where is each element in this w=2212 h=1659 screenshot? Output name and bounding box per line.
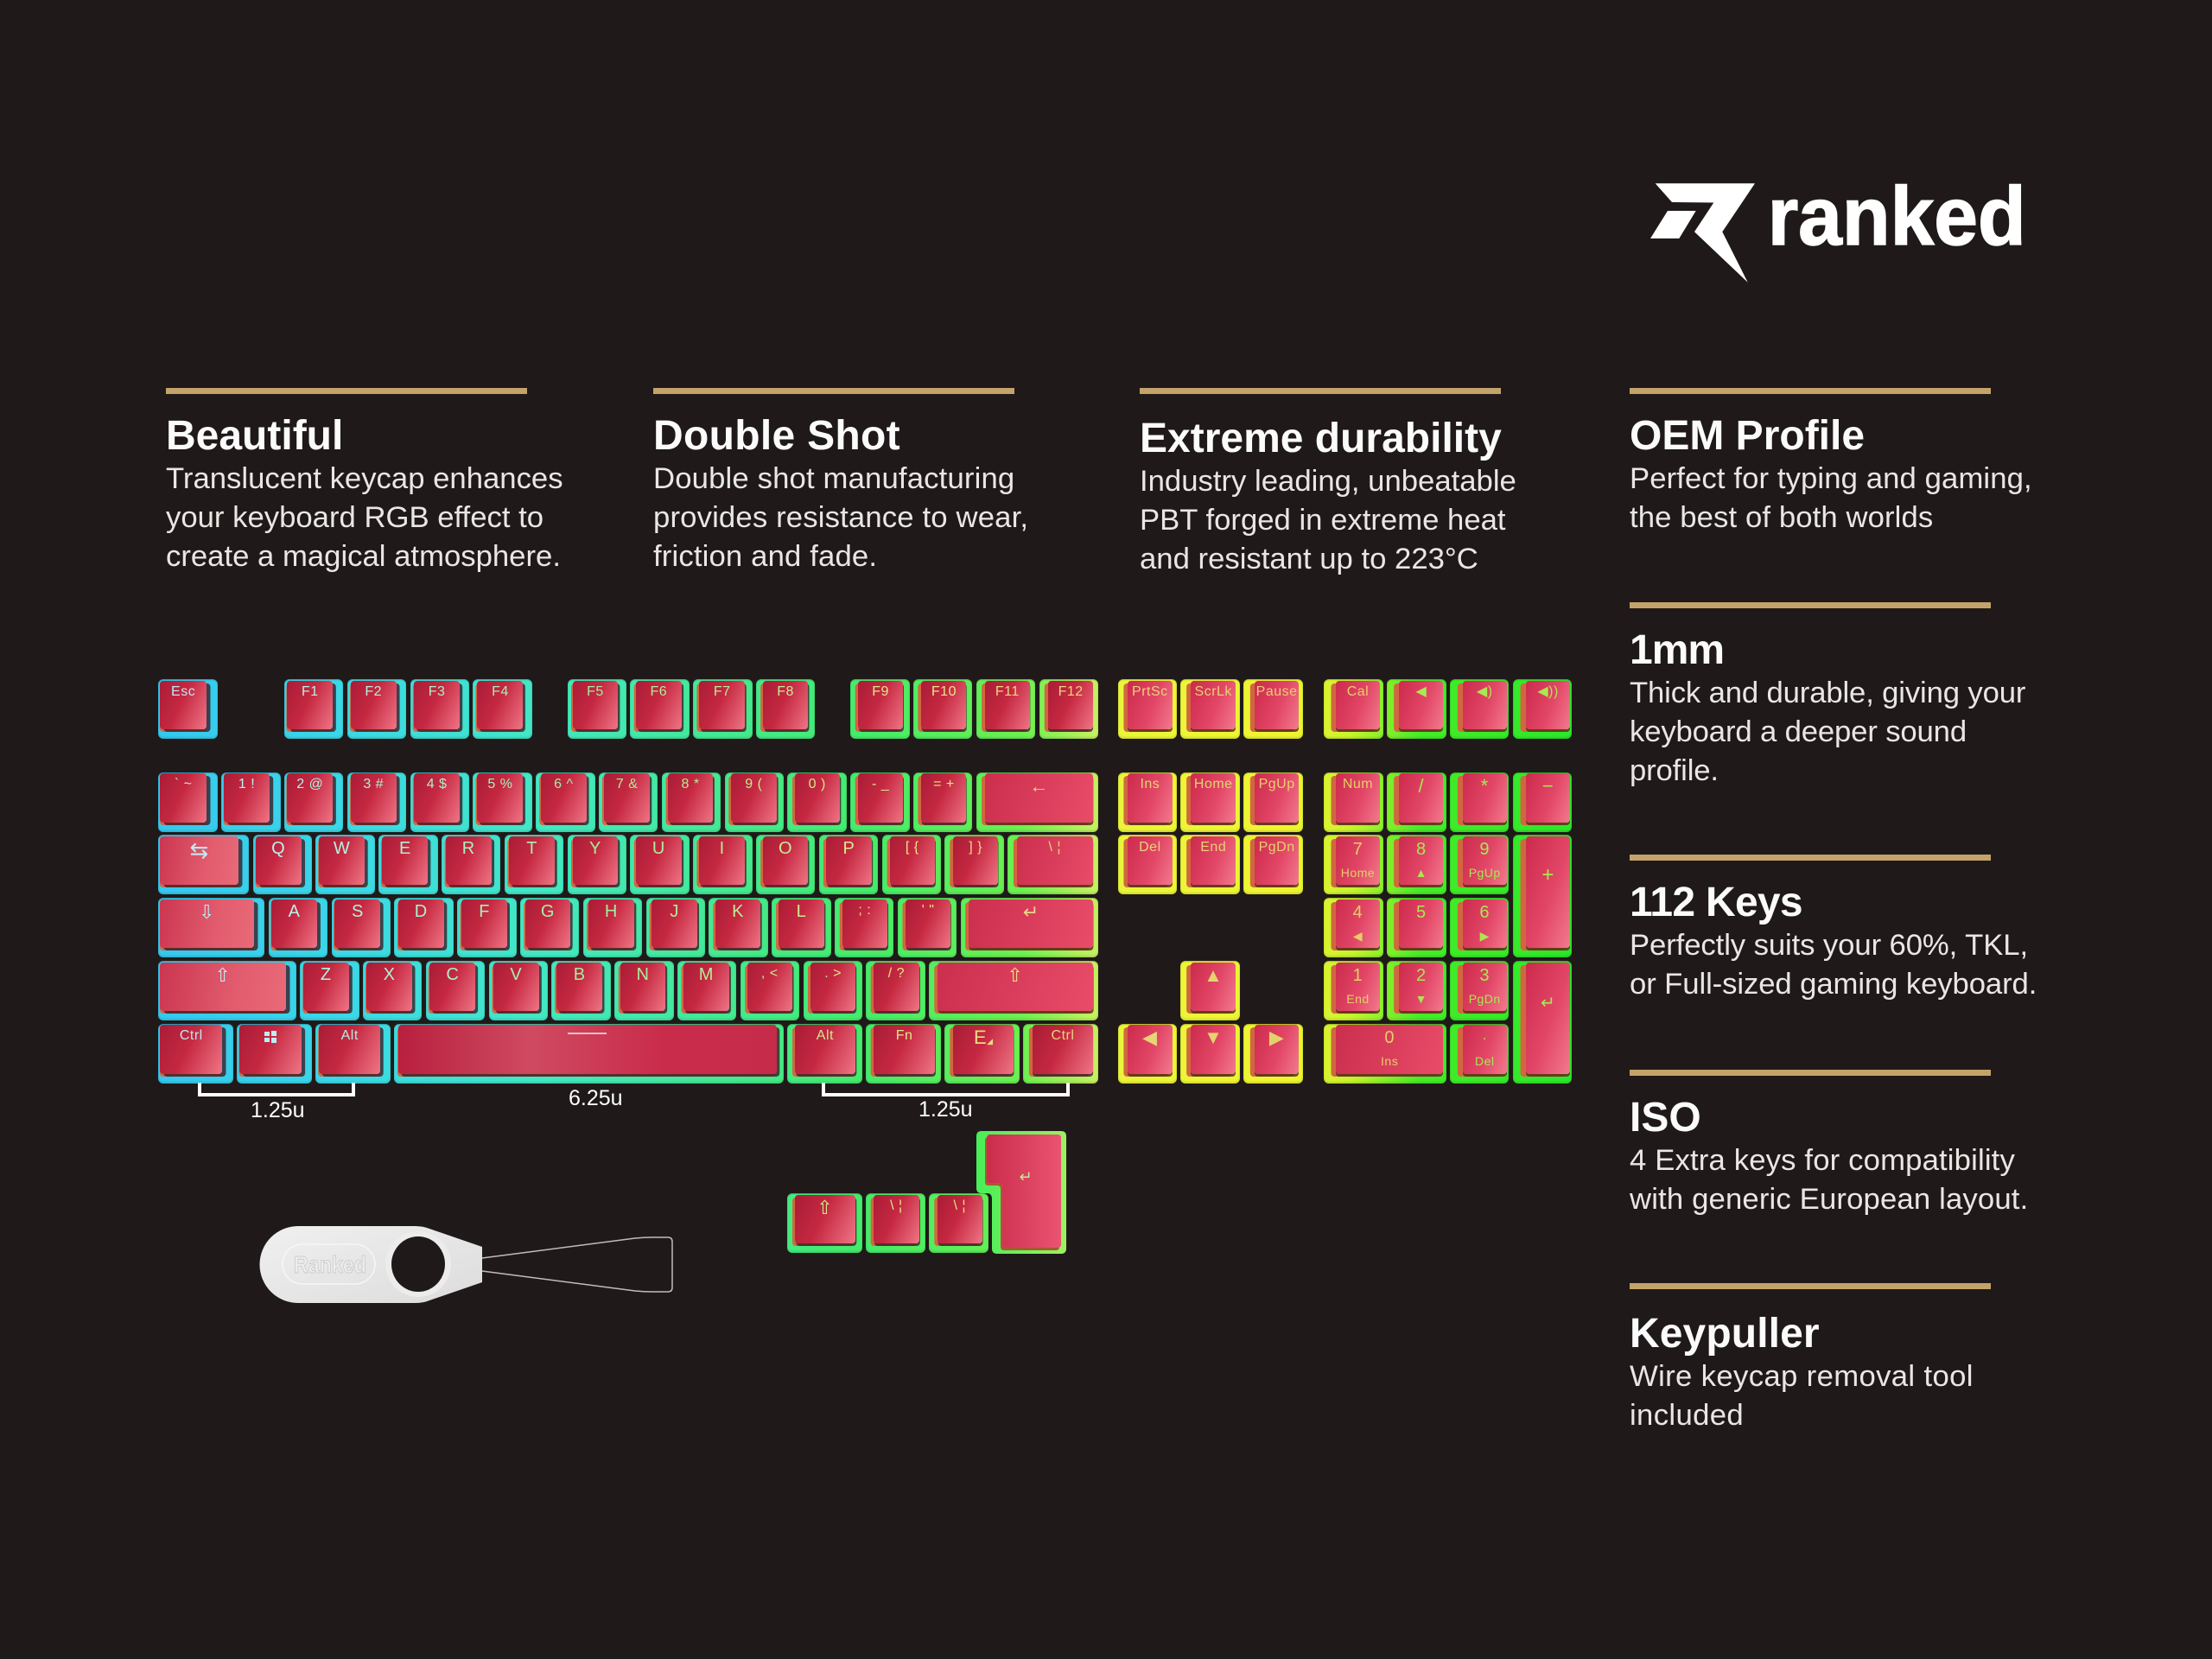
ISO extra keys: \ ¦: [954, 1198, 966, 1213]
keypuller tool: Ranked: [294, 1251, 366, 1278]
keypuller tool: [259, 1226, 673, 1303]
keyboard: shift row: 2: [1416, 966, 1427, 985]
keyboard: home row: 5: [1416, 902, 1427, 921]
keyboard: bottom row: Del: [1475, 1054, 1494, 1068]
keyboard: home row: ◀: [1353, 928, 1363, 942]
feature: ISO: with generic European layout.: [1630, 1183, 2028, 1216]
keyboard: bottom row: E◢: [974, 1027, 994, 1048]
feature: Double Shot: provides resistance to wear,: [653, 501, 1028, 534]
keyboard: function row: F3: [429, 684, 445, 698]
keyboard: bottom row: ◀: [1142, 1027, 1158, 1048]
keyboard: QWERTY row: \ ¦: [1049, 840, 1061, 854]
bracket: right modifier keys: [822, 1083, 1070, 1096]
feature: 112 Keys: [1630, 855, 2037, 1001]
keyboard: function row: F12: [1058, 684, 1084, 698]
keyboard: shift row: [158, 961, 1572, 1084]
keyboard: number row: [158, 772, 1572, 832]
keyboard: shift row: 3: [1479, 966, 1490, 985]
keyboard: shift row: 1: [1353, 966, 1363, 985]
keyboard: function row: ◀: [1415, 684, 1427, 698]
text: ↵: [1019, 1168, 1033, 1185]
keyboard: number row: 2 @: [296, 777, 323, 791]
keyboard: function row: F1: [302, 684, 319, 698]
keyboard: number row: 3 #: [363, 777, 384, 791]
logo: ranked: ranked: [1768, 170, 2026, 263]
keyboard: QWERTY row: PgDn: [1259, 840, 1295, 854]
keyboard: home row: 6: [1479, 902, 1490, 921]
ISO extra keys: \ ¦: [890, 1198, 903, 1213]
keyboard: number row: = +: [933, 777, 955, 791]
feature: Extreme durability: PBT forged in extreme heat: [1140, 504, 1506, 537]
feature: Keypuller: [1630, 1283, 1991, 1432]
ISO extra keys: ⇧: [817, 1196, 833, 1218]
keyboard: QWERTY row: [158, 835, 1572, 1080]
keyboard: number row: - _: [872, 777, 889, 791]
keyboard: home row: K: [732, 902, 744, 921]
keyboard: number row: 0 ): [809, 777, 826, 791]
keyboard: number row: 9 (: [745, 777, 762, 791]
keyboard: home row: ⇩: [199, 900, 215, 923]
keyboard: QWERTY row: Q: [271, 838, 285, 857]
keyboard: QWERTY row: ] }: [969, 840, 982, 854]
keyboard: function row: [158, 679, 1572, 739]
keyboard: function row: F6: [650, 684, 667, 698]
keyboard: QWERTY row: +: [1541, 862, 1554, 887]
keyboard: number row: /: [1419, 775, 1424, 797]
keyboard: QWERTY row: Y: [589, 838, 601, 857]
feature: 1mm: keyboard a deeper sound: [1630, 715, 1967, 748]
keyboard: home row: ↵: [1023, 900, 1039, 923]
keyboard: shift row: Z: [321, 964, 332, 983]
feature: Keypuller: Keypuller: [1630, 1311, 1820, 1357]
feature: Extreme durability: and resistant up to 223°C: [1140, 543, 1478, 575]
keyboard: function row: ◀): [1477, 684, 1493, 698]
feature: 112 Keys: or Full-sized gaming keyboard.: [1630, 968, 2037, 1001]
keyboard: home row: F: [479, 902, 490, 921]
feature: Double Shot: Double shot manufacturing: [653, 462, 1014, 495]
keyboard: shift row: N: [637, 964, 649, 983]
keyboard: number row: 8 *: [681, 777, 700, 791]
keyboard: home row: G: [541, 902, 555, 921]
keyboard: function row: Esc: [171, 684, 195, 698]
feature: Beautiful: create a magical atmosphere.: [166, 540, 561, 573]
keyboard: QWERTY row: Home: [1341, 866, 1375, 880]
keyboard: number row: ←: [1029, 775, 1049, 797]
feature: ISO: [1630, 1070, 2028, 1216]
keyboard: QWERTY row: P: [842, 838, 855, 857]
keyboard: shift row: C: [446, 964, 459, 983]
keyboard: number row: PgUp: [1259, 777, 1295, 791]
feature: 112 Keys: Perfectly suits your 60%, TKL,: [1630, 929, 2028, 962]
keyboard: bottom row: Ctrl: [180, 1028, 203, 1043]
feature: Double Shot: friction and fade.: [653, 540, 877, 573]
keyboard: home row: S: [352, 902, 364, 921]
feature: Keypuller: included: [1630, 1399, 1744, 1432]
keyboard: function row: F9: [872, 684, 889, 698]
feature: Extreme durability: [1140, 388, 1516, 575]
keyboard: function row: Cal: [1347, 684, 1369, 698]
keyboard: shift row: PgDn: [1469, 992, 1501, 1006]
keyboard: number row: Num: [1343, 777, 1373, 791]
keyboard: home row: J: [670, 902, 679, 921]
feature: Double Shot: [653, 388, 1028, 573]
dimension label: spacebar 6.25u: 6.25u: [569, 1086, 623, 1110]
feature: 1mm: [1630, 602, 2025, 787]
keyboard: QWERTY row: [ {: [906, 840, 919, 854]
dimension label: left 1.25u: 1.25u: [251, 1098, 305, 1122]
keyboard: function row: Pause: [1256, 684, 1298, 698]
keyboard: shift row: / ?: [888, 966, 905, 980]
ISO extra keys: [437, 1131, 1066, 1297]
keyboard: home row: 4: [1353, 902, 1363, 921]
keyboard: QWERTY row: 7: [1353, 840, 1363, 859]
feature: Keypuller: Wire keycap removal tool: [1630, 1360, 1974, 1393]
keyboard: shift row: M: [699, 964, 714, 983]
keyboard: function row: F10: [931, 684, 957, 698]
keyboard: shift row: ▼: [1415, 992, 1427, 1006]
keyboard: bottom row: .: [1483, 1028, 1487, 1043]
keyboard: shift row: , <: [761, 966, 779, 980]
keyboard: home row: A: [289, 902, 300, 921]
keyboard: QWERTY row: E: [399, 838, 411, 857]
keyboard: bottom row: 0: [1384, 1028, 1395, 1047]
keyboard: shift row: X: [384, 964, 395, 983]
keyboard: shift row: ↵: [1541, 994, 1555, 1013]
keyboard: bottom row: Ins: [1381, 1054, 1398, 1068]
keyboard: number row: Home: [1194, 777, 1233, 791]
keyboard: function row: ◀)): [1537, 684, 1559, 698]
keyboard: home row: [158, 898, 1509, 957]
feature: Beautiful: Beautiful: [166, 413, 343, 459]
keyboard: home row: H: [605, 902, 618, 921]
feature: OEM Profile: the best of both worlds: [1630, 501, 1933, 534]
keyboard: number row: 1 !: [238, 777, 255, 791]
keyboard: shift row: B: [574, 964, 586, 983]
keyboard: bottom row: [158, 1024, 1509, 1084]
keyboard: bottom row: ▶: [1269, 1027, 1284, 1048]
keyboard: QWERTY row: T: [526, 838, 537, 857]
keyboard: function row: F2: [365, 684, 382, 698]
keyboard: QWERTY row: Del: [1139, 840, 1161, 854]
keyboard: function row: PrtSc: [1132, 684, 1168, 698]
keyboard: function row: F4: [492, 684, 509, 698]
feature: Double Shot: Double Shot: [653, 413, 900, 459]
keyboard: function row: F11: [995, 684, 1020, 698]
keyboard: number row: ` ~: [175, 777, 192, 791]
keyboard: number row: Ins: [1140, 777, 1160, 791]
keyboard: number row: *: [1481, 775, 1489, 797]
feature: Beautiful: [166, 388, 563, 573]
keyboard: QWERTY row: 9: [1479, 840, 1490, 859]
keyboard: function row: F5: [587, 684, 604, 698]
feature: ISO: 4 Extra keys for compatibility: [1630, 1144, 2015, 1177]
feature: Beautiful: your keyboard RGB effect to: [166, 501, 543, 534]
feature: 1mm: profile.: [1630, 754, 1719, 787]
keyboard: bottom row: Alt: [817, 1028, 834, 1043]
feature: Extreme durability: Industry leading, unbeatable: [1140, 465, 1516, 498]
keyboard: home row: ▶: [1480, 928, 1490, 942]
keyboard: shift row: . >: [824, 966, 842, 980]
keyboard: shift row: V: [510, 964, 522, 983]
keyboard: bottom row: Alt: [341, 1028, 359, 1043]
keyboard: number row: −: [1542, 775, 1554, 797]
keyboard: function row: F7: [714, 684, 731, 698]
feature: Beautiful: Translucent keycap enhances: [166, 462, 563, 495]
keyboard: function row: F8: [777, 684, 794, 698]
keyboard: shift row: ⇧: [214, 964, 231, 985]
keyboard: QWERTY row: End: [1200, 840, 1226, 854]
keyboard: number row: 7 &: [616, 777, 638, 791]
feature: ISO: ISO: [1630, 1095, 1701, 1141]
keyboard: home row: ; :: [858, 902, 871, 918]
keyboard: QWERTY row: W: [334, 838, 350, 857]
keyboard: QWERTY row: I: [720, 838, 725, 857]
keyboard: number row: 6 ^: [554, 777, 573, 791]
keyboard: bottom row: Ctrl: [1052, 1028, 1074, 1043]
keyboard: shift row: ▲: [1204, 964, 1223, 985]
feature: Extreme durability: Extreme durability: [1140, 416, 1502, 461]
feature: OEM Profile: OEM Profile: [1630, 413, 1865, 459]
feature: 1mm: 1mm: [1630, 627, 1724, 673]
feature: 1mm: Thick and durable, giving your: [1630, 677, 2025, 709]
keyboard: home row: D: [415, 902, 428, 921]
keyboard: number row: 5 %: [487, 777, 512, 791]
keyboard: bottom row: ▼: [1204, 1027, 1223, 1048]
keyboard: shift row: ⇧: [1007, 964, 1023, 985]
keyboard: QWERTY row: 8: [1416, 840, 1427, 859]
keyboard: function row: ScrLk: [1195, 684, 1232, 698]
keyboard: QWERTY row: U: [652, 838, 665, 857]
keyboard: number row: 4 $: [427, 777, 447, 791]
dimension label: right 1.25u: 1.25u: [918, 1097, 973, 1122]
keyboard: shift row: End: [1346, 992, 1370, 1006]
feature: OEM Profile: [1630, 388, 2032, 534]
keyboard: QWERTY row: O: [779, 838, 792, 857]
keyboard: QWERTY row: ⇆: [189, 836, 209, 862]
keyboard: QWERTY row: ▲: [1415, 866, 1427, 880]
keyboard: home row: L: [797, 902, 806, 921]
keyboard: home row: ' ": [922, 902, 934, 918]
keyboard: bottom row: Fn: [896, 1028, 912, 1043]
feature: OEM Profile: Perfect for typing and gaming,: [1630, 462, 2032, 495]
feature: 112 Keys: 112 Keys: [1630, 880, 1802, 925]
logo: ranked: [1650, 170, 2026, 283]
keyboard: QWERTY row: R: [462, 838, 475, 857]
keyboard: QWERTY row: PgUp: [1469, 866, 1501, 880]
bracket: left modifier keys: [198, 1083, 355, 1096]
